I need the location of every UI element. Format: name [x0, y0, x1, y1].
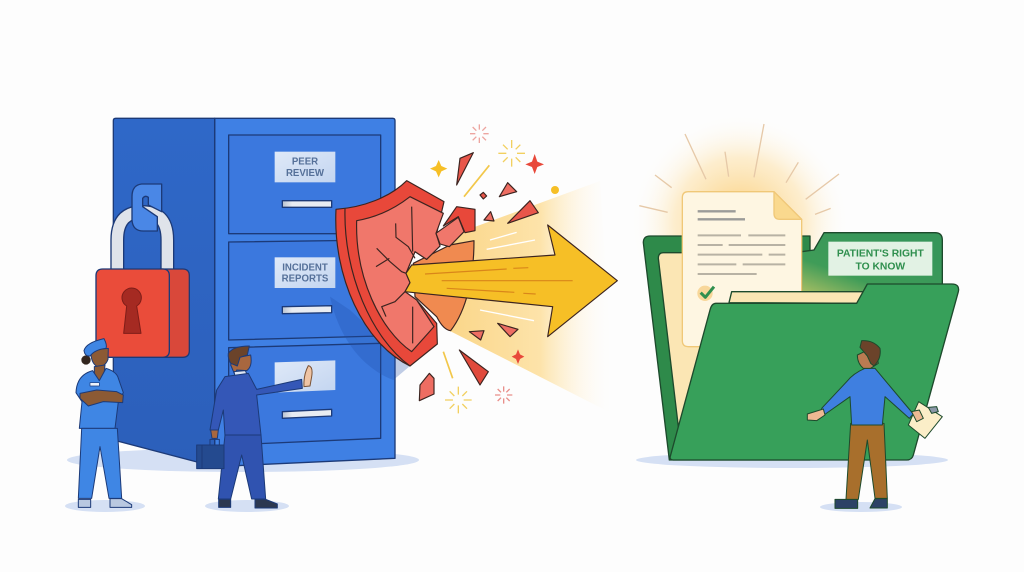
- shards and sparkles: [419, 124, 559, 413]
- label: peer review: REVIEW: [286, 168, 325, 179]
- panel: open green folder: [630, 113, 959, 508]
- document glow: [630, 113, 850, 333]
- drawer: peer review: [229, 135, 381, 234]
- cabinet front: [215, 118, 395, 467]
- ground shadows: [65, 448, 948, 512]
- light beam cone: [448, 181, 615, 415]
- person: man with clipboard: [807, 341, 942, 508]
- icon: check mark: [697, 286, 714, 301]
- broken shard: [436, 207, 475, 247]
- glow rays: [639, 124, 839, 214]
- label: peer review: [275, 152, 335, 182]
- folder back tab: [802, 233, 942, 292]
- padlock: [96, 184, 189, 357]
- arrow speed lines: [425, 268, 573, 294]
- shadow of shield: [330, 297, 410, 380]
- arrow: [405, 225, 617, 337]
- panel: locked filing cabinet: [76, 118, 395, 508]
- person: nurse: [76, 339, 132, 507]
- folder back: [643, 236, 810, 460]
- label: incident reports: REPORTS: [282, 274, 329, 285]
- label: peer review: PEER: [292, 157, 318, 168]
- shield body: [336, 181, 444, 366]
- broken inner rim: [413, 241, 474, 331]
- tab label: TO KNOW: [855, 262, 905, 273]
- tab label: [828, 242, 932, 276]
- cabinet side: [113, 118, 215, 467]
- beam highlights: [480, 232, 535, 321]
- folder paper edge: [729, 292, 864, 303]
- shield face: [357, 197, 443, 352]
- folder inner: [658, 253, 807, 427]
- panel: breaking shield and arrow: [330, 124, 617, 413]
- document: [682, 192, 802, 347]
- drawer: unlabelled: [229, 343, 381, 445]
- shield rim band: [345, 209, 410, 366]
- person: man in suit: [197, 346, 312, 508]
- cracks: [376, 207, 415, 343]
- tab label: PATIENT'S RIGHT: [837, 248, 925, 259]
- label: incident reports: INCIDENT: [282, 262, 328, 273]
- drawer: incident reports: [229, 240, 381, 340]
- label: incident reports: [275, 257, 335, 288]
- folder front: [670, 284, 959, 460]
